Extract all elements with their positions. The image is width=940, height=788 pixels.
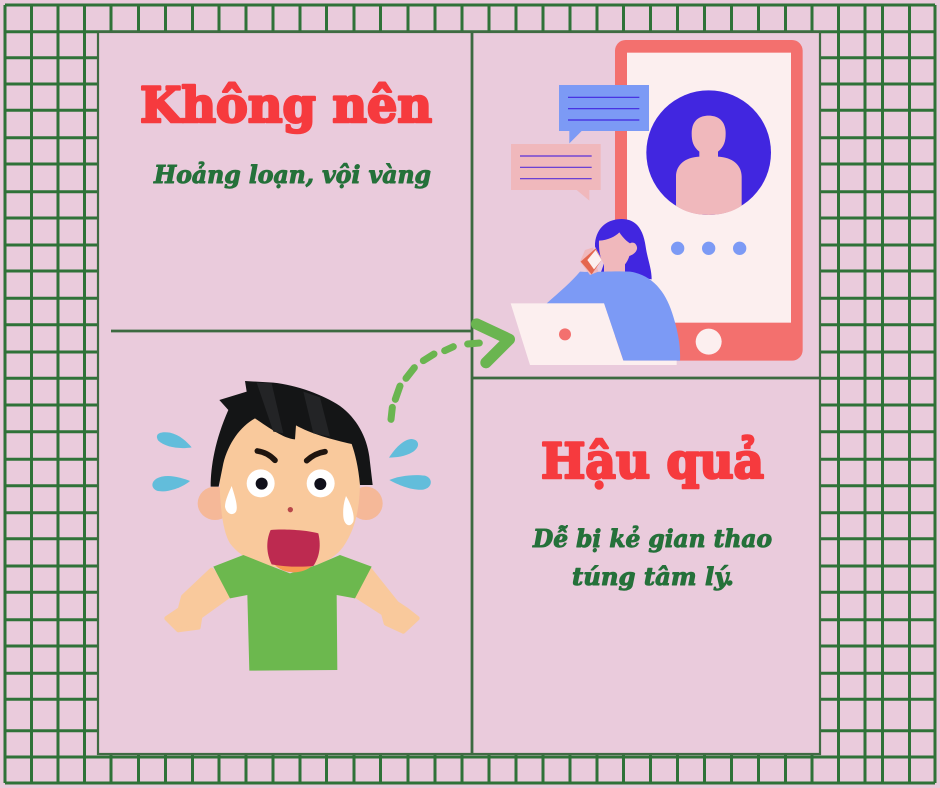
text: consequence line one: Dễ bị kẻ gian thao xyxy=(532,524,772,553)
woman on phone xyxy=(547,219,680,361)
arms xyxy=(167,570,417,631)
illustration: panicked boy xyxy=(152,381,431,671)
hair xyxy=(211,381,373,487)
text: Hoảng loạn, vội vàng: Hoảng loạn, vội vàng xyxy=(153,160,431,189)
text: consequence line two: túng tâm lý. xyxy=(572,562,734,591)
arrow: dashed curve to phone xyxy=(391,324,509,419)
eyebrows xyxy=(257,451,325,461)
call dots xyxy=(671,242,746,255)
laptop xyxy=(511,303,677,365)
eyes xyxy=(247,469,335,497)
tears xyxy=(225,486,354,525)
mouth xyxy=(267,529,320,572)
home button xyxy=(696,329,722,355)
phone body xyxy=(615,40,803,361)
ears xyxy=(198,487,383,520)
profile avatar xyxy=(646,90,771,215)
face xyxy=(219,410,360,568)
illustration: phone call with woman and chat bubbles xyxy=(511,40,803,365)
blue chat bubble xyxy=(559,85,649,143)
central panel with dividers xyxy=(98,32,820,754)
shirt xyxy=(213,555,372,671)
heading: Hậu quả: Hậu quả xyxy=(541,432,764,490)
sweat drops xyxy=(152,432,431,491)
pink chat bubble xyxy=(511,144,601,201)
nose xyxy=(288,507,293,512)
heading: Không nên: Không nên xyxy=(140,76,432,134)
phone screen xyxy=(627,53,791,323)
